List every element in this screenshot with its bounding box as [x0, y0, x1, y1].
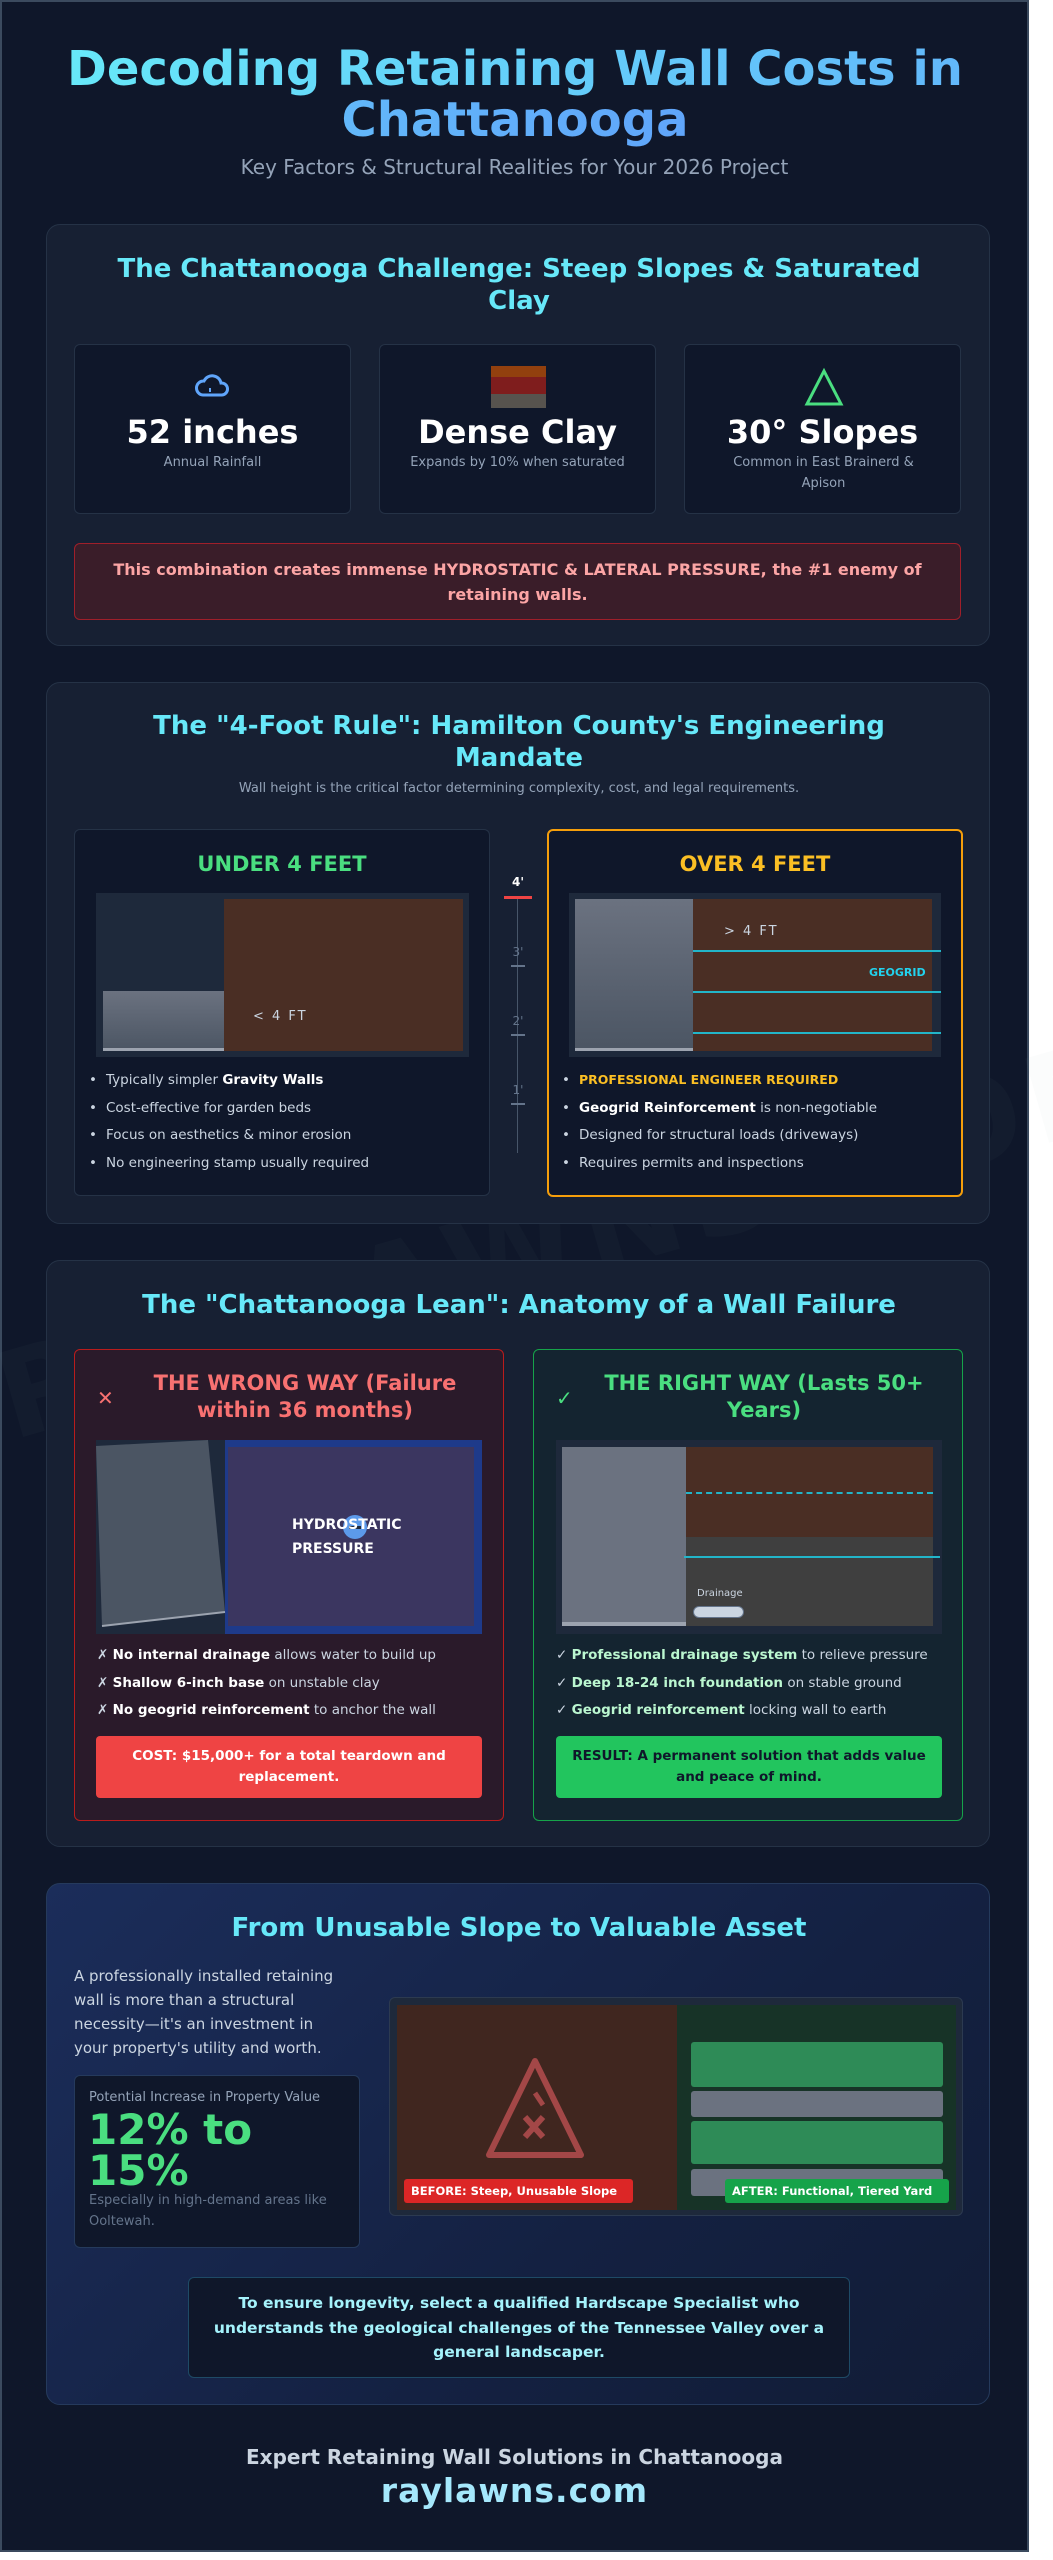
- footer: raylawns.com: [381, 2471, 648, 2510]
- diagram: leaning wall: PRESSURE: [292, 1541, 374, 1557]
- stat box: 12% to: [88, 2105, 252, 2154]
- box: under 4 feet: UNDER 4 FEET: [197, 852, 367, 876]
- before/after illustration: [389, 1997, 963, 2216]
- diagram: proper wall: [556, 1440, 942, 1634]
- stat box: Especially in high-demand areas like Ooltewah.: [89, 2193, 327, 2229]
- after: AFTER: Functional, Tiered Yard: [732, 2184, 932, 2198]
- title: Decoding Retaining Wall Costs in: [67, 41, 963, 97]
- card: rainfall: [74, 344, 351, 514]
- list: ✓ Professional drainage system to relieve pressure: [556, 1647, 928, 1663]
- bullets: Typically simpler Gravity Walls: [106, 1072, 323, 1088]
- ruler: 4': [512, 875, 524, 889]
- list: ✓ Deep 18-24 inch foundation on stable ground: [556, 1674, 902, 1690]
- card: slopes: 30° Slopes: [727, 413, 918, 451]
- panel: valuable asset: [46, 1883, 990, 2405]
- icon: cloud rain: [195, 374, 229, 396]
- ruler: [504, 875, 532, 1153]
- bullets: Requires permits and inspections: [579, 1154, 804, 1170]
- bullets: Designed for structural loads (driveways): [579, 1127, 858, 1143]
- list: ✗ Shallow 6-inch base on unstable clay: [97, 1674, 380, 1690]
- bullets: Cost-effective for garden beds: [106, 1100, 311, 1116]
- bullets: Geogrid Reinforcement is non-negotiable: [579, 1100, 877, 1116]
- bullets: PROFESSIONAL ENGINEER REQUIRED: [579, 1072, 838, 1087]
- box: over 4 feet: [547, 829, 963, 1197]
- card: slopes: Common in East Brainerd & Apison: [733, 455, 914, 491]
- panel: chattanooga lean: [46, 1260, 990, 1847]
- diagram: tall wall with geogrid: GEOGRID: [869, 966, 926, 979]
- cost box: [96, 1736, 482, 1798]
- before: [397, 2005, 677, 2210]
- diagram: short wall: [96, 893, 469, 1057]
- bullets: Focus on aesthetics & minor erosion: [106, 1127, 351, 1143]
- footer: [246, 2445, 783, 2510]
- card: clay: [379, 344, 656, 514]
- list: [556, 1647, 928, 1718]
- bullets: [564, 1072, 877, 1170]
- stat box: Potential Increase in Property Value: [89, 2090, 320, 2105]
- heading: From Unusable Slope to Valuable Asset: [232, 1913, 806, 1943]
- list: ✗ No geogrid reinforcement to anchor the wall: [97, 1702, 436, 1718]
- title: [67, 41, 963, 148]
- callout: pressure: This combination creates immense HYDROSTATIC & LATERAL PRESSURE, the #1 enemy of retaining walls.: [113, 560, 922, 604]
- ruler: 1': [513, 1083, 523, 1097]
- callout: specialist: [188, 2277, 850, 2378]
- result box: [556, 1736, 942, 1798]
- ruler: 3': [513, 945, 523, 959]
- result box: RESULT: A permanent solution that adds value and peace of mind.: [572, 1748, 926, 1785]
- icon: triangle: [804, 368, 844, 406]
- card: rainfall: 52 inches: [127, 413, 298, 451]
- subtitle: Key Factors & Structural Realities for Your 2026 Project: [241, 155, 788, 179]
- heading: The "Chattanooga Lean": Anatomy of a Wall Failure: [142, 1290, 896, 1320]
- box: under 4 feet: [74, 829, 490, 1196]
- icon: x: ✕: [97, 1386, 114, 1410]
- heading: The Chattanooga Challenge: Steep Slopes & Saturated Clay: [117, 254, 921, 316]
- title: Chattanooga: [342, 92, 688, 148]
- box: wrong way: [74, 1349, 504, 1821]
- diagram: proper wall: Drainage: [697, 1588, 743, 1599]
- diagram: short wall: < 4 FT: [253, 1009, 308, 1024]
- diagram: tall wall with geogrid: [569, 893, 941, 1057]
- diagram: leaning wall: HYDROSTATIC: [292, 1517, 401, 1533]
- card: clay: Dense Clay: [418, 413, 617, 451]
- stat box: 15%: [88, 2146, 189, 2195]
- paragraph: A professionally installed retaining wall is more than a structural necessity—it's an investment in your property's utility and worth.: [74, 1967, 333, 2057]
- before: BEFORE: Steep, Unusable Slope: [411, 2184, 617, 2198]
- list: ✗ No internal drainage allows water to build up: [97, 1647, 436, 1663]
- card: rainfall: Annual Rainfall: [164, 455, 261, 470]
- footer: Expert Retaining Wall Solutions in Chattanooga: [246, 2445, 783, 2469]
- after: [677, 2005, 956, 2210]
- box: right way: THE RIGHT WAY (Lasts 50+ Years): [604, 1371, 924, 1422]
- box: right way: [533, 1349, 963, 1821]
- icon: check: ✓: [556, 1386, 573, 1410]
- ruler: 2': [513, 1014, 523, 1028]
- box: over 4 feet: OVER 4 FEET: [680, 852, 830, 876]
- callout: pressure: [74, 543, 961, 620]
- card: slopes: [684, 344, 961, 514]
- icon: soil layers: [491, 366, 546, 408]
- diagram: tall wall with geogrid: > 4 FT: [724, 924, 779, 939]
- box: wrong way: THE WRONG WAY (Failure within 36 months): [154, 1371, 456, 1422]
- panel: 4-foot rule: [46, 682, 990, 1224]
- subheading: Wall height is the critical factor determining complexity, cost, and legal requirements.: [239, 781, 799, 796]
- list: [97, 1647, 436, 1718]
- bullets: No engineering stamp usually required: [106, 1154, 369, 1170]
- list: ✓ Geogrid reinforcement locking wall to earth: [556, 1702, 886, 1718]
- bullets: [91, 1072, 369, 1170]
- callout: specialist: To ensure longevity, select a qualified Hardscape Specialist who understands the geological challenges of the Tennessee Valley over a general landscaper.: [214, 2294, 824, 2361]
- heading: The "4-Foot Rule": Hamilton County's Engineering Mandate: [153, 711, 885, 773]
- stat box: [74, 2075, 360, 2248]
- card: clay: Expands by 10% when saturated: [410, 455, 625, 470]
- diagram: leaning wall: [96, 1440, 482, 1634]
- panel: challenge: [46, 224, 990, 646]
- cost box: COST: $15,000+ for a total teardown and replacement.: [132, 1748, 446, 1785]
